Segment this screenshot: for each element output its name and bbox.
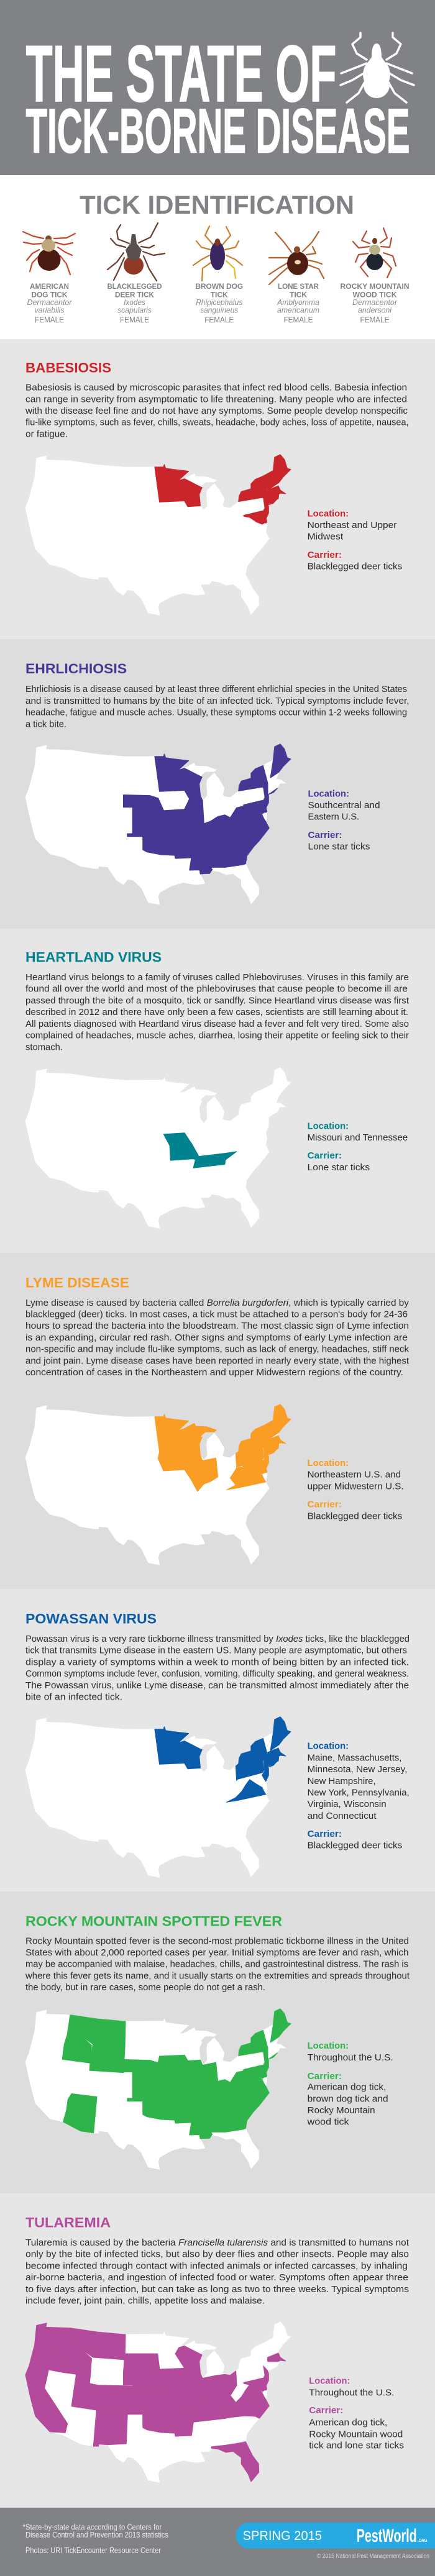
text: lyme description: and joint pain. Lyme disease cases have been reported in nearly every state, with the highest [25,1355,410,1366]
callout: lyme location and carrier [308,1458,404,1521]
callout: ehrlichiosis location and carrier: Southcentral and [308,800,380,811]
callout: tularemia location and carrier: Rocky Mountain wood [309,2429,403,2439]
tick: brown dog tick [193,226,242,281]
banner: spring 2015 and PestWorld logo [236,2523,435,2549]
label: American dog tick: FEMALE [35,316,64,324]
callout: tularemia location and carrier: tick and lone star ticks [309,2441,404,2451]
callout: tularemia location and carrier: Carrier: [309,2405,343,2416]
text: rocky mountain description: may be accompanied with malaise, headaches, chills, and gastrointestinal distress. The rash is [25,1959,408,1970]
text: heartland description: passed through the bite of a mosquito, tick or sandfly. Since Heartland virus disease was first [25,995,410,1006]
callout: tularemia location and carrier [309,2376,404,2451]
callout: lyme location and carrier: Carrier: [308,1499,342,1509]
callout: rocky mountain location and carrier: American dog tick, [308,2082,386,2093]
label: lone star tick: americanum [277,306,319,314]
panel: lyme disease [0,1253,435,1589]
text: ehrlichiosis description: a tick bite. [25,719,66,729]
text: tularemia description [25,2237,410,2306]
callout: heartland location and carrier: Carrier: [308,1150,342,1161]
label: brown dog tick: BROWN DOG [195,282,243,291]
text: babesiosis description: can range in severity from asymptomatic to life threatening. Many people who are infected [25,394,407,404]
panel: tularemia [0,2193,435,2508]
panel: babesiosis [0,339,435,639]
text: tularemia description: include fever, joint pain, chills, appetite loss and malaise. [25,2296,265,2306]
text: lyme description: Lyme disease is caused by bacteria called Borrelia burgdorferi, which is typically carried by [25,1298,410,1308]
text: babesiosis description: Babesiosis is caused by microscopic parasites that infect red blood cells. Babesia infection [25,383,407,393]
callout: ehrlichiosis location and carrier: Lone star ticks [308,841,370,852]
callout: powassan location and carrier: Virginia, Wisconsin [308,1799,387,1809]
label: blacklegged deer tick: scapularis [117,306,152,314]
label: Rocky Mountain wood tick: andersoni [358,306,392,314]
tick: Rocky Mountain wood tick [353,228,396,278]
text: babesiosis description: or fatigue. [25,429,68,439]
callout: powassan location and carrier: Blacklegged deer ticks [308,1841,402,1851]
label: Rocky Mountain wood tick: Dermacentor [352,298,398,307]
callout: powassan location and carrier: Maine, Massachusetts, [308,1752,401,1763]
label: brown dog tick: Rhipicephalus [196,298,242,307]
label: lone star tick: LONE STAR [278,282,319,291]
callout: babesiosis location and carrier [308,508,402,571]
text: heartland description: found all over the world and most of the phleboviruses that cause people to become ill are [25,984,408,994]
text: rocky mountain description: Rocky Mountain spotted fever is the second-most problematic tickborne illness in the United [25,1936,409,1946]
text: heartland description [25,972,410,1052]
callout: lyme location and carrier: Northeastern U.S. and [308,1470,401,1480]
text: ehrlichiosis description [25,684,409,729]
map: lyme states [25,1404,291,1565]
callout: powassan location and carrier: Minnesota, New Jersey, [308,1764,407,1775]
label: American dog tick: AMERICAN [30,282,69,291]
heading: babesiosis: BABESIOSIS [25,360,111,375]
callout: rocky mountain location and carrier: Location: [308,2041,349,2051]
text: sources: Disease Control and Prevention 2013 statistics [25,2531,168,2539]
banner: spring 2015 and PestWorld logo: SPRING 2015 [243,2529,322,2543]
label: Rocky Mountain wood tick: ROCKY MOUNTAIN [341,282,409,291]
label: lone star tick [277,282,319,324]
callout: lyme location and carrier: upper Midwestern U.S. [308,1481,404,1492]
callout: ehrlichiosis location and carrier: Location: [308,789,349,799]
text: heartland description: stomach. [25,1042,63,1052]
callout: rocky mountain location and carrier: wood tick [307,2117,349,2128]
text: rocky mountain description: where this fever gets its name, and it usually starts on the extremities and spreads throughout [25,1970,410,1981]
text: tularemia description: air-borne bacteria, and ingestion of infected food or water. Symptoms often appear three [25,2272,408,2283]
heading: rocky mountain spotted fever: ROCKY MOUNTAIN SPOTTED FEVER [25,1913,282,1929]
map: rocky mountain states [25,2009,291,2169]
text: ehrlichiosis description: headache, fatigue and muscle aches. Usually, these symptoms occur within 1-2 weeks following [25,708,407,718]
label: American dog tick: DOG TICK [31,291,68,299]
callout: lyme location and carrier: Blacklegged deer ticks [308,1511,402,1521]
text: babesiosis description [25,383,409,439]
callout: heartland location and carrier: Missouri and Tennessee [308,1132,408,1143]
text: tularemia description: Tularemia is caused by the bacteria Francisella tularensis and is transmitted to humans not [25,2237,410,2248]
label: brown dog tick [195,282,243,324]
text: sources: *State-by-state data according to Centers for [23,2523,162,2531]
label: Rocky Mountain wood tick [341,282,409,324]
panel: rocky mountain spotted fever [0,1891,435,2193]
text: lyme description: blacklegged (deer) ticks. In most cases, a tick must be attached to a person's body for 24-36 [25,1309,408,1319]
map: heartland states [25,1068,291,1228]
tick: lone star tick [269,232,324,284]
callout: lyme location and carrier: Location: [308,1458,349,1468]
panel: footer [0,2508,435,2576]
text: lyme description: non-specific and may include flu-like symptoms, such as lack of energy, headaches, stiff neck [25,1344,409,1355]
label: lone star tick: TICK [290,291,307,299]
heading: lyme disease: LYME DISEASE [25,1275,129,1290]
text: powassan description [25,1634,410,1702]
label: lone star tick: FEMALE [283,316,313,324]
label: blacklegged deer tick: BLACKLEGGED [107,282,162,291]
callout: babesiosis location and carrier: Blacklegged deer ticks [308,561,402,571]
label: American dog tick: variabilis [35,306,65,314]
callout: rocky mountain location and carrier: Rocky Mountain [308,2105,375,2116]
text: babesiosis description: flu-like symptoms, such as fever, chills, sweats, headache, body aches, loss of appetite, nausea, [25,417,409,428]
text: heartland description: All patients diagnosed with Heartland virus disease had a fever and felt very tired. Some also [25,1019,409,1029]
text: ehrlichiosis description: and is transmitted to humans by the bite of an infected tick. Typical symptoms include fever, [25,696,409,706]
panel: tick identification [0,175,435,339]
text: rocky mountain description: States with about 2,000 reported cases per year. Initial symptoms are fever and rash, which [25,1947,409,1958]
text: powassan description: Powassan virus is a very rare tickborne illness transmitted by Ixodes ticks, like the blacklegged [25,1634,410,1644]
callout: powassan location and carrier: and Connecticut [308,1811,377,1821]
panel: header [0,0,435,175]
label: American dog tick: Dermacentor [27,298,72,307]
icon: tick silhouette [341,33,414,102]
text: tularemia description: to five days after infection, but can take as long as two to three weeks. Typical symptoms [25,2284,409,2295]
label: lone star tick: Amblyomma [277,298,319,307]
callout: powassan location and carrier: New Hampshire, [308,1776,376,1786]
text: sources: Photos: URI TickEncounter Resource Center [25,2546,161,2555]
label: blacklegged deer tick: DEER TICK [115,291,154,299]
tick: American dog tick [23,232,75,275]
map: ehrlichiosis states [25,744,291,904]
callout: rocky mountain location and carrier: brown dog tick and [308,2093,388,2104]
text: sources [23,2523,168,2555]
callout: babesiosis location and carrier: Midwest [308,532,344,542]
text: tularemia description: become infected through contact with infected animals or infected carcasses, by inhaling [25,2260,408,2271]
text: powassan description: display a variety of symptoms within a week to month of being bitten by an infected tick. [25,1657,409,1667]
callout: heartland location and carrier: Lone star ticks [308,1162,370,1173]
heading: powassan virus: POWASSAN VIRUS [25,1611,157,1627]
text: powassan description: bite of an infected tick. [25,1692,122,1702]
text: lyme description: hours to spread the bacteria into the bloodstream. The most classic sign of Lyme infection [25,1321,409,1331]
callout: heartland location and carrier [308,1121,408,1173]
callout: babesiosis location and carrier: Location: [308,508,349,519]
label: blacklegged deer tick: FEMALE [120,316,149,324]
label: brown dog tick: TICK [211,291,228,299]
callout: ehrlichiosis location and carrier [308,789,380,852]
callout: babesiosis location and carrier: Carrier: [308,550,342,560]
panel: powassan virus [0,1589,435,1891]
callout: babesiosis location and carrier: Northeast and Upper [308,520,396,530]
heading: tick identification: TICK IDENTIFICATION [80,190,354,219]
panel: heartland virus [0,929,435,1253]
label: blacklegged deer tick [107,282,162,324]
text: powassan description: The Powassan virus, unlike Lyme disease, can be transmitted almost immediately after the [25,1680,409,1691]
callout: rocky mountain location and carrier: Carrier: [308,2071,342,2082]
map: powassan states [25,1717,291,1877]
callout: rocky mountain location and carrier: Throughout the U.S. [308,2052,393,2063]
label: blacklegged deer tick: Ixodes [124,298,145,307]
label: American dog tick [27,282,72,324]
text: ehrlichiosis description: Ehrlichiosis is a disease caused by at least three different ehrlichial species in the United States [25,684,407,694]
text: heartland description: complained of headaches, muscle aches, diarrhea, losing their appetite or feeling sick to their [25,1030,409,1041]
map: tularemia states [25,2322,291,2482]
text: babesiosis description: with the disease feel fine and do not have any symptoms. Some people develop nonspecific [25,406,408,416]
label: brown dog tick: sanguineus [200,306,238,314]
text: lyme description: is an expanding, circular red rash. Other signs and symptoms of early Lyme infection are [25,1332,408,1343]
tick: blacklegged deer tick [108,223,165,281]
text: tularemia description: only by the bite of infected ticks, but also by deer flies and other insects. People may also [25,2249,409,2260]
callout: rocky mountain location and carrier [307,2041,393,2128]
callout: tularemia location and carrier: Throughout the U.S. [309,2388,394,2398]
text: lyme description: concentration of cases in the Northeastern and upper Midwestern regions of the country. [25,1367,403,1378]
callout: tularemia location and carrier: American dog tick, [309,2417,387,2428]
heading: tularemia: TULAREMIA [25,2215,111,2231]
map: babesiosis states [25,455,291,615]
heading: heartland virus: HEARTLAND VIRUS [25,950,162,965]
label: Rocky Mountain wood tick: WOOD TICK [353,291,397,299]
callout: powassan location and carrier: New York, Pennsylvania, [308,1787,410,1798]
callout: ehrlichiosis location and carrier: Carrier: [308,830,342,840]
panel: ehrlichiosis [0,639,435,929]
label: brown dog tick: FEMALE [204,316,234,324]
text: rocky mountain description: the body, but in rare cases, some people do not get a rash. [25,1982,265,1993]
text: powassan description: Common symptoms include fever, confusion, vomiting, difficulty speaking, and general weakness. [25,1668,409,1679]
callout: powassan location and carrier [308,1741,410,1851]
heading: ehrlichiosis: EHRLICHIOSIS [25,661,127,676]
text: powassan description: tick that transmits Lyme disease in the eastern US. Many people are asymptomatic, but others [25,1645,407,1656]
text: lyme description [25,1298,410,1378]
callout: powassan location and carrier: Location: [308,1741,349,1752]
callout: ehrlichiosis location and carrier: Eastern U.S. [308,812,359,822]
label: Rocky Mountain wood tick: FEMALE [360,316,389,324]
text: heartland description: Heartland virus belongs to a family of viruses called Phleboviruses. Viruses in this family are [25,972,409,983]
banner: spring 2015 and PestWorld logo: .ORG [418,2539,428,2543]
callout: tularemia location and carrier: Location: [309,2376,350,2387]
callout: heartland location and carrier: Location: [308,1121,349,1132]
callout: powassan location and carrier: Carrier: [308,1829,342,1839]
text: rocky mountain description [25,1936,410,1993]
text: heartland description: described in 2012 and there have only been a few cases, scientists are still learning about it. [25,1007,408,1017]
